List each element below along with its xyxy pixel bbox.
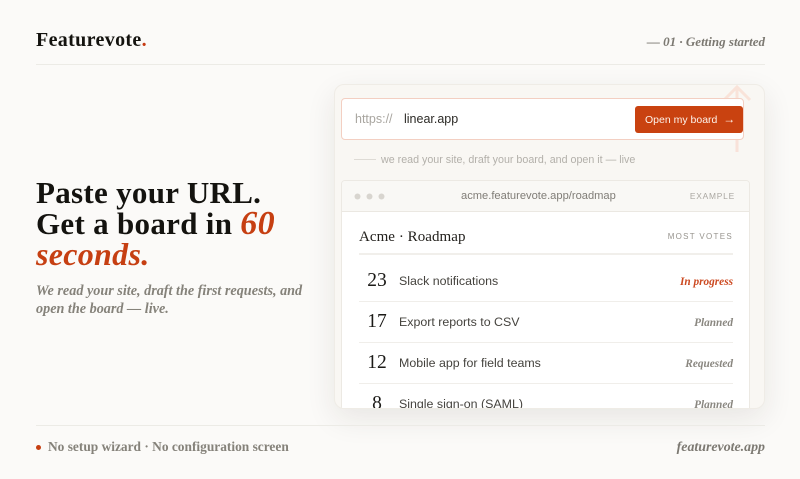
row: Slack notifications: In progress: [680, 276, 733, 288]
browser window: [341, 180, 750, 420]
row: Export reports to CSV: Export reports to CSV: [399, 315, 520, 329]
logo: Featurevote.: [36, 29, 147, 51]
icon: upward arrow: [724, 85, 751, 152]
button: open my board: Open my board →: [645, 112, 735, 126]
browser toolbar: [342, 181, 749, 212]
button: open my board: [635, 106, 743, 133]
row: Single sign-on: [372, 393, 734, 409]
subheading: [36, 283, 302, 317]
row: Slack notifications: [359, 261, 733, 302]
headline: seconds.: [36, 236, 150, 272]
row: Slack notifications: Slack notifications: [399, 274, 498, 288]
footer note: No setup wizard · No configuration screen: [48, 439, 289, 454]
section label: — 01 · Getting started: [647, 34, 765, 49]
row: Export reports to CSV: [359, 302, 733, 343]
panel: product demo: [334, 84, 765, 409]
board title: Acme · Roadmap: [359, 229, 466, 245]
row: Mobile app for field teams: Requested: [685, 358, 733, 370]
sort label: MOST VOTES: [668, 232, 733, 241]
headline: Get a board in 60: [36, 205, 275, 242]
row: Mobile app for field teams: Mobile app for field teams: [399, 356, 541, 370]
headline: Paste your URL.: [36, 175, 261, 210]
footer status dot: [36, 445, 41, 450]
row: Mobile app for field teams: 12: [367, 352, 387, 373]
helper text: we read your site, draft your board, and open it — live: [381, 154, 635, 166]
window dots: [354, 194, 384, 200]
URL input: [341, 98, 744, 140]
row: Slack notifications: 23: [367, 270, 387, 291]
footer domain: featurevote.app: [677, 440, 765, 455]
URL prefix: https://: [355, 112, 393, 126]
row: Mobile app for field teams: [359, 343, 733, 384]
address: acme.featurevote.app/roadmap: [461, 190, 616, 202]
URL value: linear.app: [404, 112, 458, 126]
headline: [36, 175, 275, 272]
row: Export reports to CSV: 17: [367, 311, 387, 332]
example tag: EXAMPLE: [690, 191, 735, 201]
subheading: open the board — live.: [36, 301, 169, 317]
subheading: We read your site, draft the first requests, and: [36, 283, 302, 299]
row: Export reports to CSV: Planned: [694, 317, 733, 329]
